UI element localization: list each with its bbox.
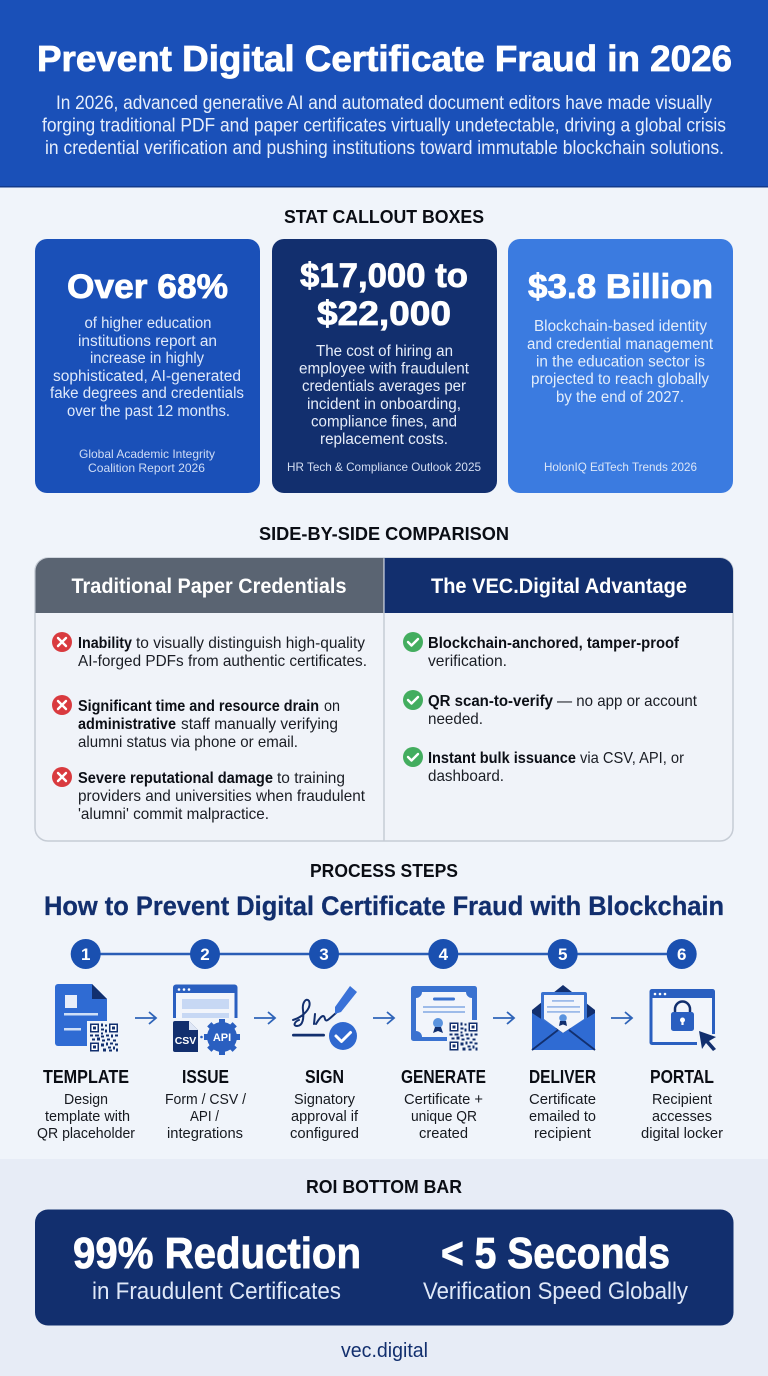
step 1 text: Design xyxy=(64,1091,108,1108)
traditional item 3: to training xyxy=(277,770,345,787)
step 2 text xyxy=(165,1067,247,1142)
stat description: increase in highly xyxy=(90,350,204,367)
step number 5 xyxy=(548,939,578,969)
step 3 text: approval if xyxy=(291,1108,359,1125)
step 2 text: API / xyxy=(190,1108,220,1125)
ROI section xyxy=(0,1159,768,1376)
step 6 text: digital locker xyxy=(641,1125,723,1142)
metric: speed: < 5 Seconds xyxy=(441,1229,670,1278)
stat description xyxy=(50,315,244,420)
stat description: and credential management xyxy=(527,336,714,353)
stat description xyxy=(527,318,714,406)
metric: speed: Verification Speed Globally xyxy=(423,1278,688,1305)
traditional item 2: alumni status via phone or email. xyxy=(78,734,298,751)
icon: template xyxy=(55,984,119,1053)
advantage item 1: Blockchain-anchored, tamper-proof xyxy=(428,635,680,652)
step 5 text: Certificate xyxy=(529,1091,596,1108)
comparison table xyxy=(35,558,733,841)
step number 3: 3 xyxy=(319,945,329,964)
advantage item 2: — no app or account xyxy=(557,693,698,710)
advantage item 2 xyxy=(403,690,698,728)
stat description: of higher education xyxy=(84,315,212,332)
advantage item 1 xyxy=(403,632,680,670)
panel: stat 68% xyxy=(35,239,260,493)
step 2 text: Form / CSV / xyxy=(165,1091,247,1108)
process title: How to Prevent Digital Certificate Fraud with Blockchain xyxy=(44,891,724,921)
stat description: incident in onboarding, xyxy=(307,396,461,413)
icon: issue: CSV xyxy=(175,1035,196,1047)
stat source xyxy=(79,447,215,475)
icon: check xyxy=(403,632,423,652)
step 3 text: configured xyxy=(290,1125,359,1142)
step number 4 xyxy=(428,939,458,969)
icon: deliver xyxy=(532,985,595,1050)
icon: cross xyxy=(52,695,72,715)
metric: reduction: in Fraudulent Certificates xyxy=(92,1278,341,1305)
stat value xyxy=(300,257,468,333)
traditional item 1: Inability xyxy=(78,635,132,652)
stat description: Blockchain-based identity xyxy=(534,318,707,335)
arrow xyxy=(135,1012,156,1024)
advantage item 3 xyxy=(403,747,685,785)
step number 6: 6 xyxy=(677,945,686,964)
step 2 text: integrations xyxy=(167,1125,243,1142)
heading: comparison: SIDE-BY-SIDE COMPARISON xyxy=(259,524,509,544)
step 6 text xyxy=(641,1067,723,1142)
advantage item 3: Instant bulk issuance xyxy=(428,750,576,767)
traditional item 3: providers and universities when fraudulent xyxy=(78,788,366,805)
heading: process steps: PROCESS STEPS xyxy=(310,861,458,881)
stat description: in the education sector is xyxy=(536,354,705,370)
step number 2 xyxy=(190,939,220,969)
traditional item 1: to visually distinguish high-quality xyxy=(136,635,365,652)
panel: advantage header: The VEC.Digital Advantage xyxy=(431,575,687,598)
intro text: in credential verification and pushing institutions toward immutable blockchain solutions. xyxy=(45,138,724,159)
step 1 text: template with xyxy=(45,1108,130,1125)
panel: stat market xyxy=(508,239,733,493)
traditional item 2: Significant time and resource drain xyxy=(78,698,319,715)
footer url: vec.digital xyxy=(341,1340,428,1362)
icon: cross xyxy=(52,767,72,787)
intro text: forging traditional PDF and paper certificates virtually undetectable, driving a global crisis xyxy=(42,116,726,136)
stat source: HolonIQ EdTech Trends 2026 xyxy=(544,460,697,474)
metric: reduction: 99% Reduction xyxy=(73,1229,361,1278)
traditional item 1 xyxy=(52,632,367,670)
step timeline xyxy=(71,939,697,969)
step 3 text xyxy=(290,1067,359,1142)
arrow xyxy=(611,1012,632,1024)
stat description: compliance fines, and xyxy=(311,414,457,430)
step 6 text: PORTAL xyxy=(650,1067,714,1087)
icon: portal xyxy=(650,989,719,1052)
stat description: over the past 12 months. xyxy=(67,403,230,420)
stat value: Over 68% xyxy=(67,268,228,306)
step 1 text: TEMPLATE xyxy=(43,1067,129,1087)
traditional item 3: 'alumni' commit malpractice. xyxy=(78,806,269,823)
header banner xyxy=(0,0,768,188)
panel: traditional header xyxy=(36,558,384,613)
icon: issue xyxy=(169,984,245,1055)
step 1 text xyxy=(37,1067,135,1142)
step 5 text: DELIVER xyxy=(529,1067,596,1087)
step number 4: 4 xyxy=(439,945,449,964)
icon: issue: API xyxy=(213,1032,231,1044)
stat value: $17,000 to xyxy=(300,257,468,295)
step number 2: 2 xyxy=(200,945,210,964)
intro text: In 2026, advanced generative AI and automated document editors have made visually xyxy=(56,93,712,114)
stat source: Global Academic Integrity xyxy=(79,447,215,461)
stat description: sophisticated, AI-generated xyxy=(53,368,241,385)
advantage item 3: dashboard. xyxy=(428,768,504,785)
advantage item 3: via CSV, API, or xyxy=(580,750,685,767)
traditional item 2: on xyxy=(324,698,340,715)
step 6 text: accesses xyxy=(652,1108,712,1125)
step number 1 xyxy=(71,939,101,969)
advantage item 1: verification. xyxy=(428,653,507,670)
arrow xyxy=(373,1012,394,1024)
metric: speed xyxy=(423,1229,688,1305)
heading: ROI: ROI BOTTOM BAR xyxy=(306,1177,462,1197)
traditional item 3: Severe reputational damage xyxy=(78,770,273,787)
traditional item 2 xyxy=(52,695,340,751)
step 5 text: emailed to xyxy=(529,1108,596,1125)
stat description: The cost of hiring an xyxy=(316,343,453,360)
stat source: Coalition Report 2026 xyxy=(88,461,205,475)
step number 1: 1 xyxy=(81,945,90,964)
step 1 text: QR placeholder xyxy=(37,1125,135,1142)
step 4 text: created xyxy=(419,1125,468,1142)
step 2 text: ISSUE xyxy=(182,1067,229,1087)
step 4 text: unique QR xyxy=(411,1108,477,1125)
icon: generate xyxy=(411,986,479,1052)
step 5 text: recipient xyxy=(534,1125,592,1142)
stat description: institutions report an xyxy=(78,333,217,350)
panel: advantage header xyxy=(384,558,733,613)
step 4 text xyxy=(401,1067,486,1142)
traditional item 3 xyxy=(52,767,366,823)
step number 5: 5 xyxy=(558,945,567,964)
step 4 text: GENERATE xyxy=(401,1067,486,1087)
panel: ROI bar xyxy=(35,1210,734,1326)
stat description: by the end of 2027. xyxy=(556,389,684,406)
icon: check xyxy=(403,690,423,710)
panel: traditional header: Traditional Paper Credentials xyxy=(72,575,346,598)
title: Prevent Digital Certificate Fraud in 2026 xyxy=(37,38,732,79)
traditional item 2: staff manually verifying xyxy=(181,716,338,733)
icon: sign xyxy=(292,986,357,1050)
stat value: $3.8 Billion xyxy=(528,268,713,306)
stat description xyxy=(299,343,470,448)
stat description: credentials averages per xyxy=(302,378,466,395)
step 3 text: SIGN xyxy=(305,1067,344,1087)
heading: stat callouts: STAT CALLOUT BOXES xyxy=(284,207,484,227)
traditional item 1: AI-forged PDFs from authentic certificates. xyxy=(78,653,367,670)
stat source: HR Tech & Compliance Outlook 2025 xyxy=(287,460,481,474)
step 3 text: Signatory xyxy=(294,1091,355,1108)
arrow xyxy=(493,1012,514,1024)
step 4 text: Certificate + xyxy=(404,1091,483,1108)
icon: check xyxy=(403,747,423,767)
step number 3 xyxy=(309,939,339,969)
stat description: replacement costs. xyxy=(320,431,448,448)
metric: reduction xyxy=(73,1229,361,1305)
stat description: fake degrees and credentials xyxy=(50,385,244,402)
step 5 text xyxy=(529,1067,596,1142)
stat description: employee with fraudulent xyxy=(299,360,470,378)
step number 6 xyxy=(667,939,697,969)
stat description: projected to reach globally xyxy=(531,371,709,388)
icon: cross xyxy=(52,632,72,652)
step 6 text: Recipient xyxy=(652,1091,713,1108)
panel: stat cost xyxy=(272,239,497,493)
advantage item 2: needed. xyxy=(428,711,483,728)
traditional item 2: administrative xyxy=(78,716,176,733)
arrow xyxy=(254,1012,275,1024)
advantage item 2: QR scan-to-verify xyxy=(428,693,553,710)
stat value: $22,000 xyxy=(317,295,451,333)
intro text xyxy=(42,93,726,159)
